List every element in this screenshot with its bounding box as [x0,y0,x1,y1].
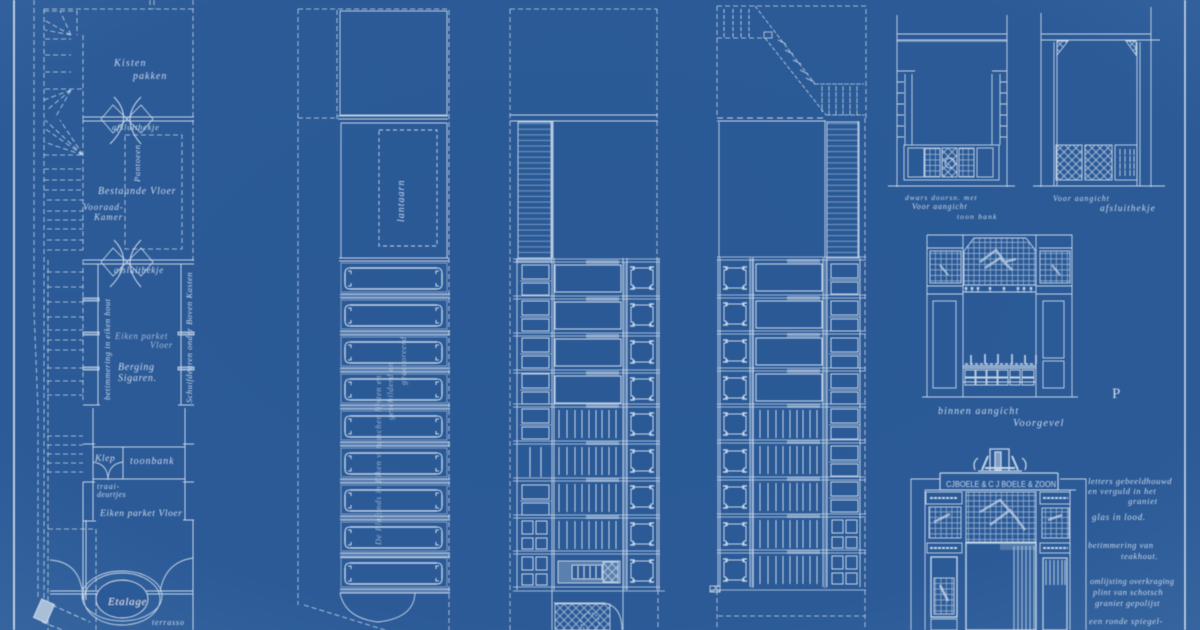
shop-front notes: graniet [1128,496,1158,506]
panel: floor plan: Eiken parket [114,331,168,341]
panel: right interior elevation [710,6,866,630]
drawing: interior facade view [922,235,1078,429]
display window with curtain [966,543,1036,630]
shop-front notes: letters gebeeldhouwd [1088,476,1172,486]
walls [83,117,194,264]
panel: floor plan: Eiken parket Vloer [99,509,183,519]
drawing: section with counter view: toon bank [957,212,998,221]
base ornament [554,603,622,630]
hatched stair [827,122,859,258]
outer frame [911,479,1086,630]
centre cabinets [555,260,621,549]
panel: floor plan: pakken [132,71,167,82]
wall box [552,121,553,258]
stained glass bands [930,238,1070,285]
diagonal stair [755,6,865,115]
coffered ceiling panels [340,263,450,593]
drawing: shop front with signage [911,449,1174,630]
outline [1033,7,1165,187]
outline [888,15,1015,187]
dashed outlines [298,9,449,630]
window display counter [963,354,1036,385]
dashed outlines [717,6,866,630]
panel: floor plan: toonbank [130,456,174,467]
entrance arc [340,593,415,622]
drawing: partition front view [1033,7,1165,214]
counter front [904,145,999,180]
shop-front notes: teakhout. [1121,551,1158,561]
sheet letter P: P [1112,386,1120,402]
panel: floor plan: Sigaren. [118,373,157,384]
transom lights [966,287,1031,292]
shop-front curves and display case [50,462,193,594]
stair run top [724,9,749,37]
panel: floor plan [14,0,194,630]
panel: floor plan: Kamer [93,212,123,222]
panel: floor plan: terrasso [152,618,185,627]
panel: ceiling plan: geschilderd en [385,362,395,420]
sheet margin line left [13,0,15,630]
left column cabinets [520,265,551,585]
left column ornate squares [723,267,747,581]
outline [922,235,1078,397]
panel: ceiling plan [298,9,450,630]
plan labels: Kisten [113,58,147,69]
panel: ceiling plan: gedecoreerd [398,336,408,385]
row lines [513,259,665,591]
right column cabinets [829,264,860,584]
doors [933,301,1064,388]
ornamental drawer [558,561,620,583]
shop-front notes: glas in lood. [1092,512,1146,522]
lantern outline [379,130,437,246]
shop-front notes [1088,476,1174,626]
lantern label: lantaarn [396,180,407,222]
handwritten ceiling note: De Plafonds in Eiken v. tusschen lijsten en [373,375,383,546]
wall box [719,121,825,258]
beam [717,120,826,122]
drawing: partition front view: afsluithekje [1100,203,1156,214]
upper ceiling box [340,11,447,115]
stair walls and dashed outlines [34,0,193,630]
hatched stair [518,122,551,258]
panel: floor plan: Pantoeen [132,144,142,183]
right door [1043,558,1067,630]
caption: binnen aangicht [938,406,1019,417]
beam [338,116,448,123]
crest [974,449,1026,471]
drawing: section with counter view: Voor aangicht [912,202,968,211]
sheet margin line right [1184,0,1186,630]
panel: left interior elevation [510,9,665,630]
shop-front notes: betimmering van [1088,540,1154,550]
row lines [711,257,866,590]
dashed outlines [510,9,658,630]
drawing: section with counter view [888,15,1015,221]
beam [510,115,658,121]
lattice lower panels [1056,145,1137,180]
door swings [101,97,153,144]
panel: floor plan: Bestaande Vloer [98,186,176,197]
shop-front notes: en verguld in het [1088,486,1156,496]
caption: Voor aangicht [1053,194,1110,203]
caption: dwars doorsn. met [905,193,978,202]
panel: floor plan: deurtjes [97,490,126,499]
panel: floor plan: Etalage [107,596,147,608]
panel: floor plan: Klep [94,454,115,464]
entrance detail [34,599,54,623]
panel: floor plan: afsluithekje [112,122,160,132]
panel: floor plan: traai- [97,482,120,491]
shop-front notes: een ronde spiegel- [1089,616,1163,626]
lantern ceiling box [341,123,447,258]
panel: floor plan: Schuifdeuren onder Boven Kasten [184,272,194,403]
panel: floor plan: Vloer [150,340,173,350]
frame verticals [517,258,659,630]
stained glass panes [926,492,1070,553]
shop-front notes: graniet gepolijst [1095,598,1160,608]
panel: floor plan: betimmering in eiken hout [102,298,112,400]
frame verticals [718,258,860,587]
pilasters [897,71,1007,145]
drawing: interior facade view: Voorgevel [1013,418,1064,429]
panel: floor plan: afsluithekje [114,265,164,275]
panel: floor plan: Vooraad- [83,202,124,212]
stair edge [857,121,859,258]
shop-front notes: plint van schotsch [1092,587,1163,597]
brackets [1057,41,1136,55]
centre cabinets [756,259,822,584]
shop-front notes: omlijsting overkraging [1090,577,1174,586]
beam above panels [339,258,449,261]
sign text: CJBOELE & C J BOELE & ZOON [946,480,1056,489]
right column ornate squares [630,267,654,582]
left door [931,557,957,630]
panel: floor plan: Berging [118,362,155,373]
